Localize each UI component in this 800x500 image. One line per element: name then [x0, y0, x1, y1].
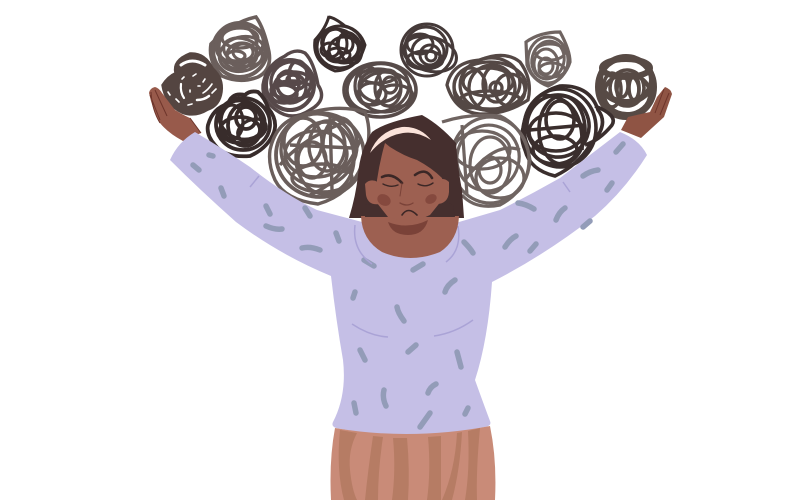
- scribble: upper right centre: [447, 53, 529, 115]
- eyebrows, eyes, nose, mouth: [382, 172, 433, 215]
- scribble: centre: [343, 59, 416, 117]
- scribble: lower left, dark: [208, 91, 275, 156]
- sweater spots: [193, 144, 623, 427]
- right hand fingers: [655, 89, 669, 115]
- right hand: [621, 87, 672, 138]
- scribble: large right of head: [442, 115, 530, 206]
- scribble: far right, dense: [598, 57, 654, 117]
- scribble: top centre right: [400, 24, 460, 77]
- headband: [370, 127, 431, 153]
- left hand fingers: [150, 90, 201, 133]
- scribble highlights: [168, 61, 216, 105]
- chin shadow: [388, 220, 428, 235]
- skirt stripes: [339, 428, 480, 500]
- scribble: top centre left, thin dark: [315, 16, 366, 71]
- ears: [365, 179, 449, 204]
- hair behind chin: [365, 200, 455, 217]
- scribble: lower right, dark: [518, 86, 613, 176]
- scribble: large left of head: [270, 106, 369, 204]
- left hand: [149, 87, 201, 141]
- skirt: [330, 426, 495, 500]
- sweater: [170, 132, 647, 435]
- scribble: top left, grey: [210, 17, 270, 80]
- cheeks: [375, 192, 438, 208]
- hair: [349, 115, 464, 218]
- scribble: top right, grey: [526, 32, 570, 86]
- scribble: upper left centre: [263, 51, 322, 116]
- scribble: far left, dense: [162, 53, 222, 115]
- face: [377, 143, 444, 220]
- sweater creases: [250, 176, 570, 337]
- neck: [361, 216, 459, 258]
